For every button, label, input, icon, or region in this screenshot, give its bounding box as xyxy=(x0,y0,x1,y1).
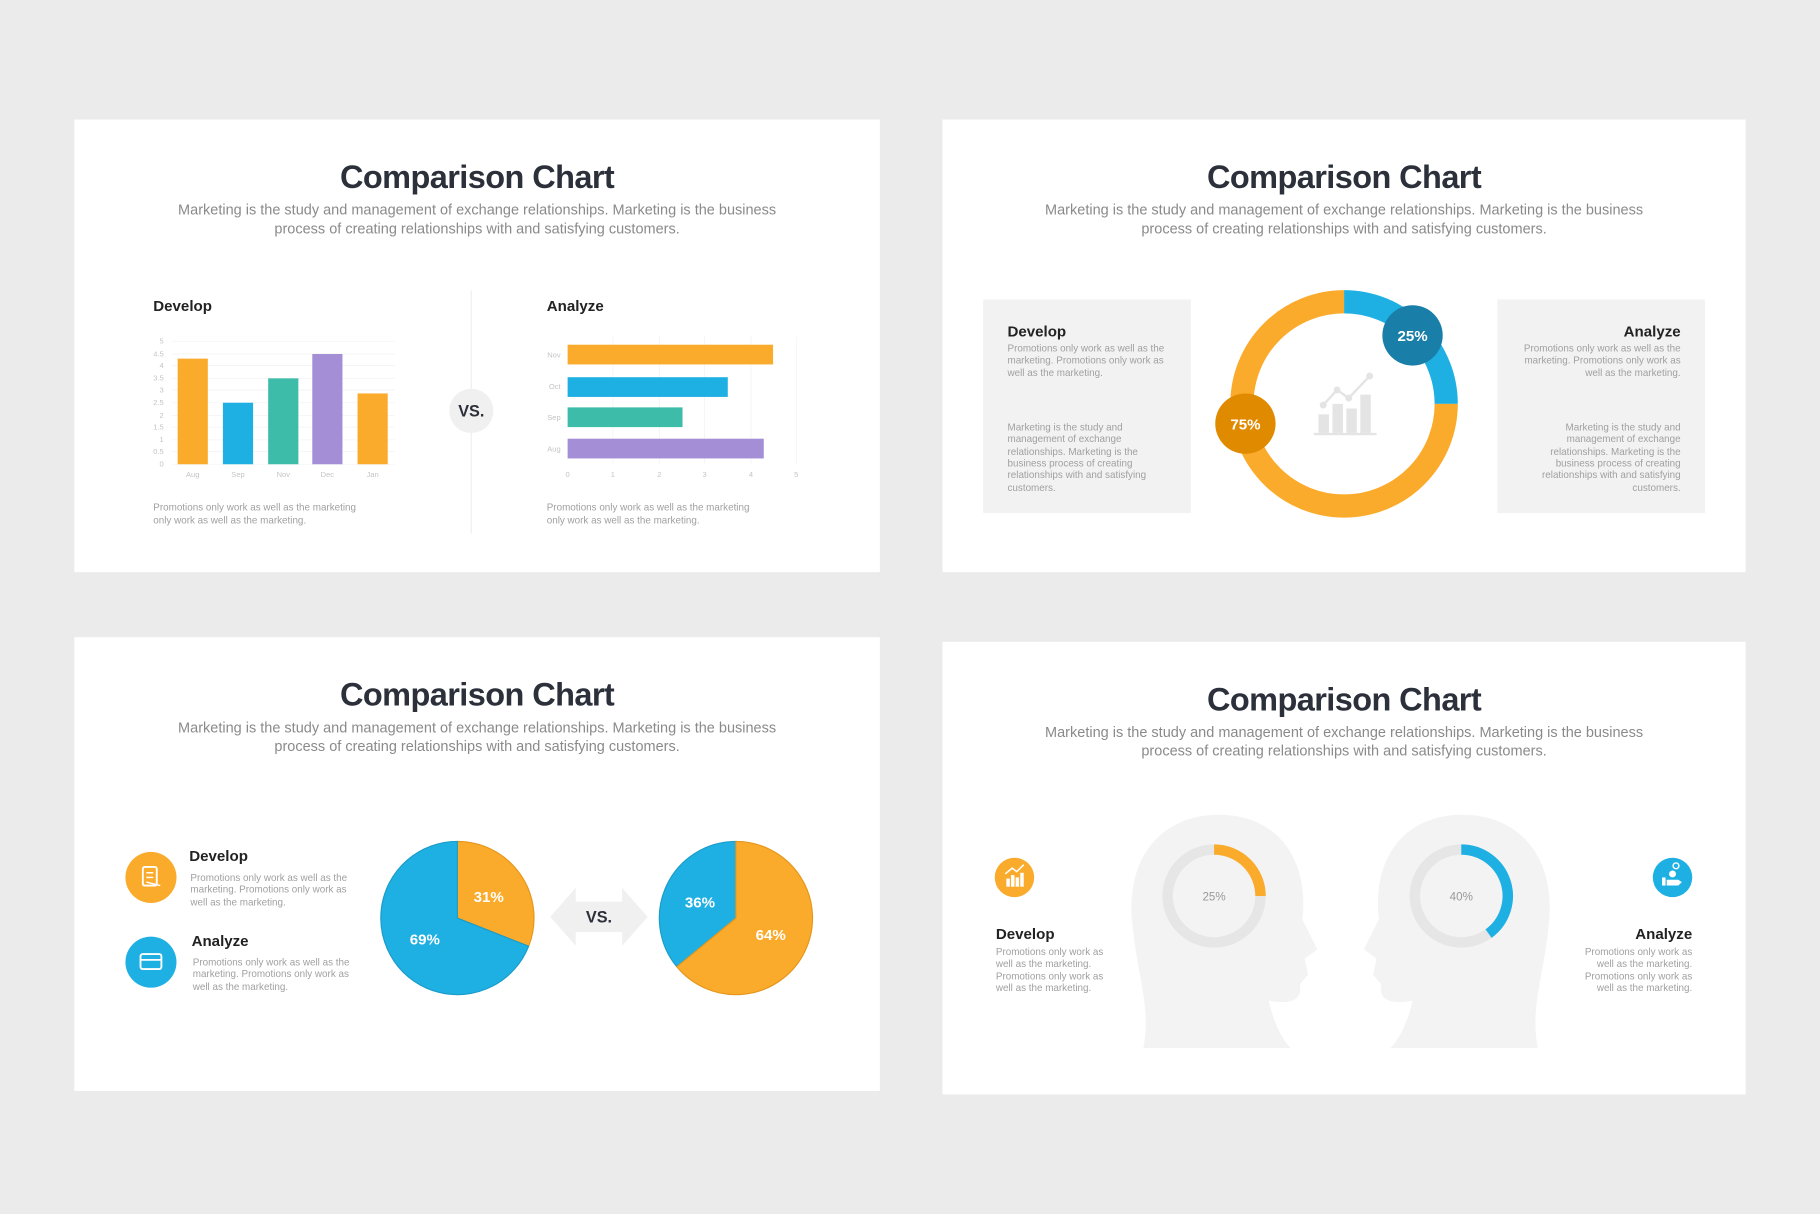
text box: Analyze: marketing. Promotions only work as xyxy=(1524,355,1681,366)
vertical bar chart: 5 xyxy=(160,337,164,346)
head left xyxy=(1131,815,1317,1048)
text box: Develop: marketing. Promotions only work as xyxy=(1007,355,1164,366)
text: Analyze xyxy=(1585,926,1692,994)
vertical bar chart: Jan xyxy=(367,470,379,479)
subtitle: Marketing is the study and management of exchange relationships. Marketing is the business xyxy=(178,203,776,219)
donut chart xyxy=(1242,302,1446,506)
text: Develop xyxy=(995,926,1103,994)
panel: bar charts xyxy=(74,120,880,572)
badge 75%: 75% xyxy=(1230,416,1261,433)
horizontal bar chart: Nov xyxy=(547,350,561,359)
ring 25% xyxy=(1168,850,1261,942)
horizontal bar chart: Aug xyxy=(547,444,561,453)
panel: heads xyxy=(942,642,1746,1094)
text box: Develop: management of exchange xyxy=(1007,434,1122,445)
ring 40%: 40% xyxy=(1450,891,1473,904)
subtitle xyxy=(178,203,776,237)
legend: Develop: Develop xyxy=(189,848,248,865)
pie chart 2: 64% xyxy=(756,927,786,944)
horizontal bar chart: 4 xyxy=(749,470,753,479)
arrow: vs: VS. xyxy=(586,909,612,927)
horizontal bar chart: 1 xyxy=(611,470,615,479)
badge 25% xyxy=(1382,305,1443,366)
text: Develop: well as the marketing. xyxy=(995,959,1091,970)
vertical bar chart: Dec xyxy=(321,470,334,479)
legend: Analyze: Promotions only work as well as the xyxy=(193,958,350,969)
horizontal bar chart: 5 xyxy=(794,470,798,479)
caption right: only work as well as the marketing. xyxy=(547,515,700,526)
vertical bar chart: 0.5 xyxy=(153,447,164,456)
panel: donut xyxy=(942,120,1746,572)
pie chart 1: 31% xyxy=(474,889,504,906)
title: Comparison Chart xyxy=(340,677,615,713)
arrow: vs xyxy=(550,888,648,946)
icon: hand coins xyxy=(1653,858,1692,897)
text box: Analyze: Promotions only work as well as the xyxy=(1524,344,1681,355)
pie chart 2: 36% xyxy=(685,895,716,912)
vertical bar chart: 0 xyxy=(160,460,164,469)
pie chart 1: 69% xyxy=(410,932,441,949)
icon: growth xyxy=(995,858,1034,897)
vertical bar chart xyxy=(153,337,395,479)
badge 75% xyxy=(1215,393,1276,454)
text box: Analyze: relationships with and satisfying xyxy=(1542,470,1681,481)
caption right: Promotions only work as well as the marketing xyxy=(547,503,749,514)
caption left xyxy=(153,503,356,526)
text: Analyze: Promotions only work as xyxy=(1585,947,1692,958)
text: Develop: Develop xyxy=(996,926,1055,943)
text box: Analyze: customers. xyxy=(1632,483,1681,494)
vs badge: VS. xyxy=(458,403,484,421)
vs badge xyxy=(449,389,493,433)
subtitle xyxy=(178,720,776,755)
legend: Analyze: marketing. Promotions only work as xyxy=(193,969,349,980)
text: Analyze: Promotions only work as xyxy=(1585,972,1692,983)
subtitle xyxy=(1045,203,1643,237)
text: Develop: Promotions only work as xyxy=(996,947,1103,958)
badge 25%: 25% xyxy=(1397,328,1428,345)
text box: Analyze: well as the marketing. xyxy=(1584,368,1681,379)
icon: card xyxy=(125,937,176,988)
vertical bar chart: Nov xyxy=(277,470,290,479)
subtitle: Marketing is the study and management of exchange relationships. Marketing is the business xyxy=(1045,203,1643,219)
text box: Analyze: Marketing is the study and xyxy=(1566,423,1681,434)
heading: Develop: Develop xyxy=(153,298,212,315)
icon: document xyxy=(125,852,176,903)
text box: Analyze: relationships. Marketing is the xyxy=(1550,447,1681,458)
subtitle: process of creating relationships with and satisfying customers. xyxy=(274,739,680,755)
text box: Develop: Marketing is the study and xyxy=(1007,423,1123,434)
legend: Develop: Promotions only work as well as the xyxy=(190,873,348,884)
vertical bar chart: 4.5 xyxy=(153,349,164,358)
vertical bar chart: 3 xyxy=(160,385,164,394)
text: Analyze: Analyze xyxy=(1635,926,1692,943)
text box: Analyze xyxy=(1497,299,1705,513)
text box: Develop: Promotions only work as well as the xyxy=(1007,344,1165,355)
title: Comparison Chart xyxy=(1207,681,1482,717)
heading: Analyze: Analyze xyxy=(547,298,604,315)
caption left: only work as well as the marketing. xyxy=(153,515,306,526)
pie chart 1 xyxy=(381,841,534,995)
panel: pies xyxy=(74,637,880,1091)
icon: chart xyxy=(1314,373,1377,435)
legend: Analyze xyxy=(192,933,350,993)
head right xyxy=(1364,815,1550,1048)
horizontal bar chart: Sep xyxy=(547,413,561,422)
subtitle: Marketing is the study and management of exchange relationships. Marketing is the business xyxy=(1045,725,1643,741)
text: Analyze: well as the marketing. xyxy=(1596,959,1692,970)
horizontal bar chart: Oct xyxy=(549,382,562,391)
title: Comparison Chart xyxy=(340,159,615,195)
text box: Develop: business process of creating xyxy=(1007,459,1132,470)
subtitle: process of creating relationships with and satisfying customers. xyxy=(1141,221,1547,237)
text box: Develop: Develop xyxy=(1007,324,1066,341)
text box: Analyze: management of exchange xyxy=(1567,434,1681,445)
subtitle: process of creating relationships with and satisfying customers. xyxy=(1141,744,1547,760)
text: Develop: Promotions only work as xyxy=(996,972,1103,983)
horizontal bar chart xyxy=(547,337,798,479)
vertical bar chart: Sep xyxy=(231,470,245,479)
vertical bar chart: 3.5 xyxy=(153,374,164,383)
vertical bar chart: 4 xyxy=(160,361,164,370)
vertical bar chart: 2 xyxy=(160,411,164,420)
horizontal bar chart: 2 xyxy=(657,470,661,479)
vertical bar chart: Aug xyxy=(186,470,199,479)
text box: Develop: customers. xyxy=(1007,483,1056,494)
legend: Analyze: well as the marketing. xyxy=(192,982,288,993)
legend: Analyze: Analyze xyxy=(192,933,249,950)
horizontal bar chart: 3 xyxy=(702,470,707,479)
subtitle: Marketing is the study and management of exchange relationships. Marketing is the business xyxy=(178,720,776,736)
caption left: Promotions only work as well as the marketing xyxy=(153,503,356,514)
text: Develop: well as the marketing. xyxy=(995,983,1091,994)
text box: Analyze: Analyze xyxy=(1624,324,1681,341)
ring 40% xyxy=(1415,850,1508,942)
vertical bar chart: 2.5 xyxy=(153,398,164,407)
subtitle: process of creating relationships with and satisfying customers. xyxy=(274,221,680,237)
text box: Develop: well as the marketing. xyxy=(1006,368,1103,379)
title: Comparison Chart xyxy=(1207,159,1482,195)
subtitle xyxy=(1045,725,1643,760)
text box: Analyze: business process of creating xyxy=(1556,459,1681,470)
pie chart 2 xyxy=(659,841,813,995)
legend: Develop: well as the marketing. xyxy=(189,897,286,908)
caption right xyxy=(547,503,749,526)
text box: Develop: relationships with and satisfying xyxy=(1007,470,1146,481)
text: Analyze: well as the marketing. xyxy=(1596,983,1692,994)
vertical bar chart: 1.5 xyxy=(153,422,164,431)
text box: Develop: relationships. Marketing is the xyxy=(1007,447,1138,458)
legend: Develop xyxy=(189,848,348,908)
text box: Develop xyxy=(983,299,1191,513)
legend: Develop: marketing. Promotions only work as xyxy=(190,885,347,896)
ring 25%: 25% xyxy=(1202,891,1226,904)
horizontal bar chart: 0 xyxy=(566,470,570,479)
vertical bar chart: 1 xyxy=(160,435,164,444)
